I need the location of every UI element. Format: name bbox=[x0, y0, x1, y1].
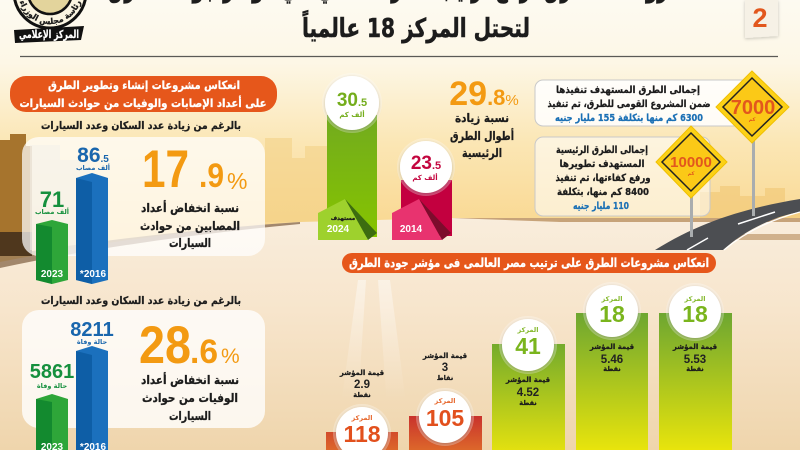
info box: 7000 km: 6300 كم منها بتكلفة 155 مليار جنيه bbox=[555, 113, 703, 124]
heading pill: accidents: انعكاس مشروعات إنشاء وتطوير الطرق bbox=[48, 78, 240, 93]
road sign: 7000 bbox=[716, 71, 789, 216]
column: rank 18, 5.46: نقطة bbox=[603, 365, 621, 373]
column: rank 41, 4.52: نقطة bbox=[519, 399, 537, 407]
statistic: 28.6%: السيارات bbox=[169, 409, 211, 423]
heading pill: road quality ranking bbox=[342, 253, 716, 273]
column: rank 18, 5.46: 5.46 bbox=[601, 354, 623, 366]
bar: 2024 target: مستهدف bbox=[331, 216, 355, 222]
column: rank 18, 5.46: قيمة المؤشر bbox=[589, 343, 634, 351]
info box: 10000 km: 8400 كم منها، بتكلفة bbox=[557, 187, 649, 198]
statistic: 17.9%: 17 bbox=[142, 140, 189, 199]
column: rank 118, 2.9 bbox=[326, 369, 398, 450]
heading pill: accidents bbox=[10, 76, 277, 112]
info box: 7000 km: ضمن المشروع القومى للطرق، تم تنفيذ bbox=[548, 99, 710, 110]
heading pill: road quality ranking: انعكاس مشروعات الطرق على ترتيب مصر العالمى فى مؤشر جودة الطرق bbox=[349, 255, 709, 270]
bar: 2016 deaths: حالة وفاة bbox=[77, 338, 107, 346]
statistic: 28.6% bbox=[139, 316, 240, 423]
title: لتحتل المركز 18 عالمياً bbox=[302, 9, 530, 44]
bar: 2023 injuries bbox=[35, 187, 69, 284]
bar: 2023 deaths: حالة وفاة bbox=[37, 382, 67, 390]
column: rank 118, 2.9: المركز bbox=[351, 414, 372, 422]
road sign: 10000 bbox=[656, 126, 727, 237]
page badge bbox=[745, 0, 778, 38]
column: rank 41, 4.52: 41 bbox=[515, 333, 541, 359]
title bbox=[108, 0, 698, 44]
page badge: 2 bbox=[752, 3, 768, 33]
column: rank 41, 4.52: المركز bbox=[517, 326, 538, 334]
bar: 2016 injuries: ألف مصاب bbox=[76, 163, 110, 172]
column: rank 18, 5.53: 5.53 bbox=[684, 354, 706, 366]
bar: 2016 injuries: *2016 bbox=[80, 269, 107, 280]
statistic: 17.9%: المصابين من حوادث bbox=[140, 219, 240, 234]
statistic: 29.8%: الرئيسية bbox=[462, 146, 502, 160]
bar: 2024 target bbox=[318, 73, 382, 240]
column: rank 18, 5.46: 18 bbox=[599, 301, 625, 327]
statistic: 29.8%: نسبة زيادة bbox=[455, 111, 509, 125]
bar: 2023 injuries: 71 bbox=[40, 187, 64, 212]
road illustration bbox=[655, 199, 800, 250]
bar: 2016 injuries bbox=[76, 144, 110, 284]
logo: Cabinet Media Center bbox=[13, 0, 87, 43]
header rule bbox=[20, 56, 778, 58]
panel: deaths bbox=[22, 310, 265, 450]
road sign: 7000: كم bbox=[749, 117, 755, 123]
info box: 10000 km bbox=[535, 137, 710, 216]
bar: 2016 injuries: 86.5 bbox=[77, 144, 109, 167]
statistic: 29.8%: 29.8% bbox=[449, 75, 519, 113]
subheading: injuries: بالرغم من زيادة عدد السكان وعدد السيارات bbox=[41, 120, 241, 132]
column: rank 105, 3: 3 bbox=[442, 362, 448, 374]
statistic: 28.6%: نسبة انخفاض أعداد bbox=[141, 372, 239, 387]
column: rank 105, 3: المركز bbox=[434, 397, 455, 405]
info box: 7000 km bbox=[535, 80, 750, 126]
bar: 2023 injuries: 2023 bbox=[41, 269, 64, 280]
statistic: 17.9%: % bbox=[227, 168, 247, 194]
column: rank 41, 4.52 bbox=[492, 316, 565, 450]
statistic: 17.9%: السيارات bbox=[169, 236, 211, 250]
column: rank 118, 2.9: 2.9 bbox=[354, 379, 370, 391]
subheading: deaths: بالرغم من زيادة عدد السكان وعدد السيارات bbox=[41, 295, 241, 307]
column: rank 41, 4.52: 4.52 bbox=[517, 387, 539, 399]
bar: 2016 deaths bbox=[70, 319, 114, 450]
column: rank 18, 5.46: المركز bbox=[601, 295, 622, 303]
column: rank 18, 5.46 bbox=[576, 282, 648, 450]
column: rank 105, 3: 105 bbox=[426, 405, 464, 431]
column: rank 18, 5.53: نقطة bbox=[686, 365, 704, 373]
panel: injuries bbox=[22, 137, 265, 284]
column: rank 18, 5.53: قيمة المؤشر bbox=[672, 343, 717, 351]
panel: road length increase bbox=[318, 73, 519, 240]
bar: 2014: 2014 bbox=[400, 224, 423, 235]
statistic: 17.9%: نسبة انخفاض أعداد bbox=[141, 200, 239, 215]
column: rank 105, 3 bbox=[409, 352, 482, 450]
road sign: 10000: 10000 bbox=[670, 154, 712, 171]
logo: Cabinet Media Center: المركز الإعلامي bbox=[19, 28, 79, 41]
heading pill: accidents: على أعداد الإصابات والوفيات من حوادث السيارات bbox=[20, 95, 266, 111]
bar: 2014 bbox=[392, 138, 455, 240]
statistic: 28.6%: % bbox=[221, 345, 240, 368]
bar: 2024 target: 2024 bbox=[327, 224, 350, 235]
info box: 10000 km: إجمالى الطرق الرئيسية bbox=[556, 145, 648, 156]
info box: 10000 km: ورفع كفاءتها، تم تنفيذ bbox=[556, 173, 650, 184]
statistic: 29.8%: أطوال الطرق bbox=[450, 128, 514, 144]
info box: 10000 km: المستهدف تطويرها bbox=[560, 159, 644, 170]
bar: 2024 target: 30.5 bbox=[337, 90, 367, 111]
bar: 2023 injuries: ألف مصاب bbox=[35, 207, 69, 216]
info box: 10000 km: 110 مليار جنيه bbox=[573, 201, 629, 212]
road sign: 10000: كم bbox=[688, 171, 694, 177]
column: rank 18, 5.53: المركز bbox=[684, 295, 705, 303]
bar: 2016 deaths: 8211 bbox=[70, 319, 114, 341]
column: rank 18, 5.53: 18 bbox=[682, 301, 708, 327]
statistic: 29.8% bbox=[449, 75, 519, 160]
column: rank 118, 2.9: قيمة المؤشر bbox=[339, 369, 384, 377]
statistic: 17.9%: .9 bbox=[199, 157, 224, 195]
bar: 2014: ألف كم bbox=[412, 173, 438, 182]
bar: 2014: 23.5 bbox=[411, 153, 441, 174]
statistic: 28.6%: 28 bbox=[139, 316, 191, 375]
bar: 2024 target: ألف كم bbox=[339, 110, 365, 119]
column: rank 118, 2.9: 118 bbox=[343, 421, 381, 447]
bar: 2023 deaths: 5861 bbox=[30, 361, 74, 383]
bar: 2023 deaths bbox=[30, 361, 74, 450]
statistic: 28.6%: الوفيات من حوادث bbox=[142, 391, 238, 406]
column: rank 41, 4.52: قيمة المؤشر bbox=[505, 376, 550, 384]
chart: road quality ranking bbox=[326, 282, 732, 450]
info box: 7000 km: إجمالى الطرق المستهدف تنفيذها bbox=[556, 85, 700, 96]
column: rank 105, 3: قيمة المؤشر bbox=[422, 352, 467, 360]
road sign: 7000: 7000 bbox=[731, 97, 775, 119]
statistic: 28.6%: .6 bbox=[190, 333, 218, 371]
column: rank 118, 2.9: نقطة bbox=[353, 391, 371, 399]
statistic: 17.9% bbox=[140, 140, 247, 250]
column: rank 105, 3: نقاط bbox=[437, 374, 453, 382]
column: rank 18, 5.53 bbox=[659, 283, 732, 450]
